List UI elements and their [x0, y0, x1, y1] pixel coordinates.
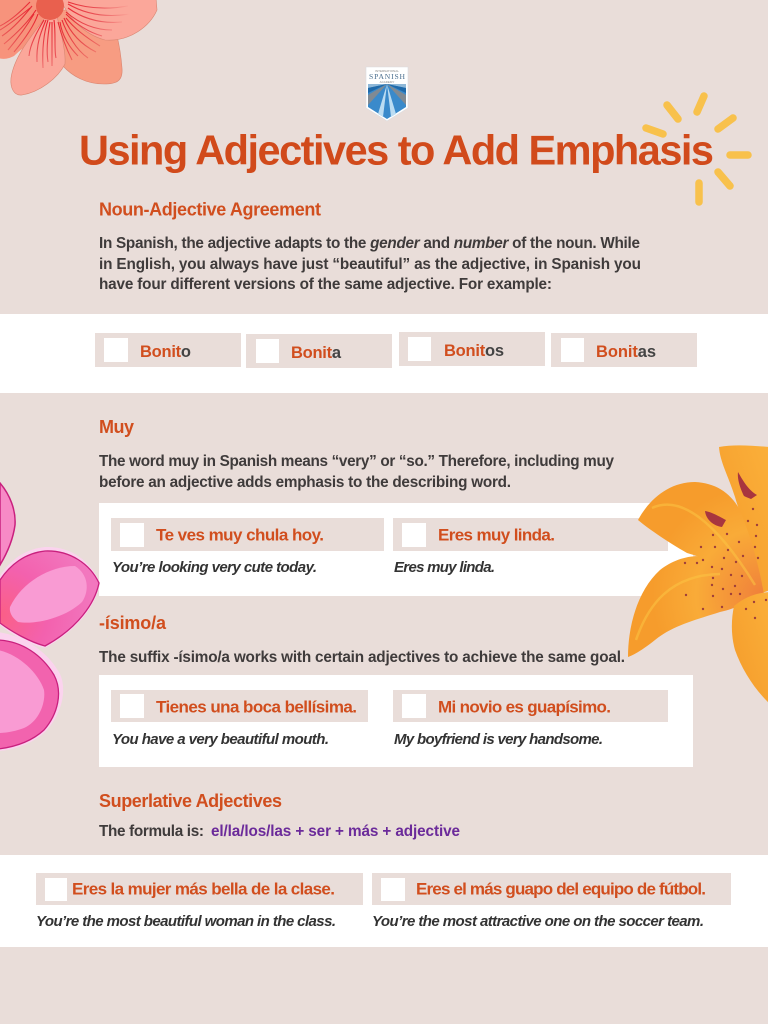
chip: Bonita — [246, 334, 392, 368]
chip: Bonitas: Bonitas — [596, 343, 656, 361]
chip: Bonito — [95, 333, 241, 367]
example: Tienes una boca bellísima — [111, 690, 368, 748]
text block: agreement explanation: In Spanish, the adjective adapts to the gender and number of the noun. While — [99, 235, 640, 252]
text block: superlative formula: el/la/los/las + ser + más + adjective — [211, 823, 460, 840]
example: Eres el más guapo del equipo de fútbol: You’re the most attractive one on the soccer team. — [372, 913, 704, 930]
example: Eres muy linda: Eres muy linda. — [438, 526, 555, 544]
text block: superlative formula — [99, 823, 460, 840]
-ísimo/a examples — [111, 690, 668, 748]
icon: orange lily, right edge — [628, 445, 768, 704]
text block: muy explanation: before an adjective adds emphasis to the describing word. — [99, 474, 511, 491]
text block: superlative formula: The formula is: — [99, 823, 204, 840]
example: Tienes una boca bellísima: Tienes una boca bellísima. — [156, 698, 357, 716]
example: Mi novio es guapísimo: My boyfriend is very handsome. — [394, 731, 603, 748]
example: Eres muy linda — [393, 518, 668, 576]
heading: -ísimo/a: -ísimo/a — [99, 613, 167, 633]
example: Eres muy linda: Eres muy linda. — [394, 559, 495, 576]
heading: Noun-Adjective Agreement: Noun-Adjective Agreement — [99, 200, 321, 220]
text block: agreement explanation: in English, you always have just “beautiful” as the adjective, in Spanish you — [99, 256, 641, 273]
chip: Bonito: Bonito — [140, 343, 191, 361]
icon: Spanish academy shield logo: INTERNATIONAL — [375, 69, 399, 73]
example: Eres el más guapo del equipo de fútbol — [372, 873, 731, 930]
example: Te ves muy chula hoy — [111, 518, 384, 576]
icon: pink flower, left edge — [0, 483, 100, 751]
chip: Bonitos — [399, 332, 545, 366]
example: Te ves muy chula hoy: You’re looking very cute today. — [112, 559, 317, 576]
example: Eres la mujer más bella de la clase: You’re the most beautiful woman in the class. — [36, 913, 336, 930]
title: Using Adjectives to Add Emphasis — [79, 126, 714, 174]
icon: yellow sun rays around title — [646, 96, 748, 202]
example: Mi novio es guapísimo: Mi novio es guapísimo. — [438, 698, 611, 716]
heading: Superlative Adjectives: Superlative Adjectives — [99, 791, 282, 811]
example: Eres el más guapo del equipo de fútbol: Eres el más guapo del equipo de fútbol. — [416, 880, 706, 898]
example: Eres la mujer más bella de la clase — [36, 873, 363, 930]
example: Mi novio es guapísimo — [393, 690, 668, 748]
panel: white box for -ísimo/a examples — [99, 675, 693, 767]
chip: Bonita: Bonita — [291, 344, 342, 362]
adjective forms row — [95, 332, 697, 368]
chip: Bonitas — [551, 333, 697, 367]
icon: Spanish academy shield logo: ACADEMY — [380, 80, 394, 84]
example: Eres la mujer más bella de la clase: Eres la mujer más bella de la clase. — [72, 880, 335, 898]
icon: red-salmon flower, top left — [0, 0, 157, 95]
example: Tienes una boca bellísima: You have a very beautiful mouth. — [112, 731, 329, 748]
text block: muy explanation — [99, 453, 614, 491]
icon: Spanish academy shield logo: SPANISH — [369, 72, 406, 81]
icon: Spanish academy shield logo — [366, 67, 408, 121]
text block: agreement explanation — [99, 235, 641, 293]
text block: agreement explanation: have four different versions of the same adjective. For example: — [99, 276, 552, 293]
panel: white band for superlative examples — [0, 855, 768, 947]
superlative examples — [36, 873, 731, 930]
chip: Bonitos: Bonitos — [444, 342, 504, 360]
muy examples — [111, 518, 668, 576]
panel: white box for muy examples — [99, 503, 693, 596]
example: Te ves muy chula hoy: Te ves muy chula hoy. — [156, 526, 324, 544]
text block: muy explanation: The word muy in Spanish means “very” or “so.” Therefore, including muy — [99, 453, 614, 470]
heading: Muy: Muy — [99, 417, 134, 437]
panel: white band behind adjective forms — [0, 314, 768, 393]
text block: suffix explanation: The suffix -ísimo/a works with certain adjectives to achieve the same goal. — [99, 649, 625, 666]
